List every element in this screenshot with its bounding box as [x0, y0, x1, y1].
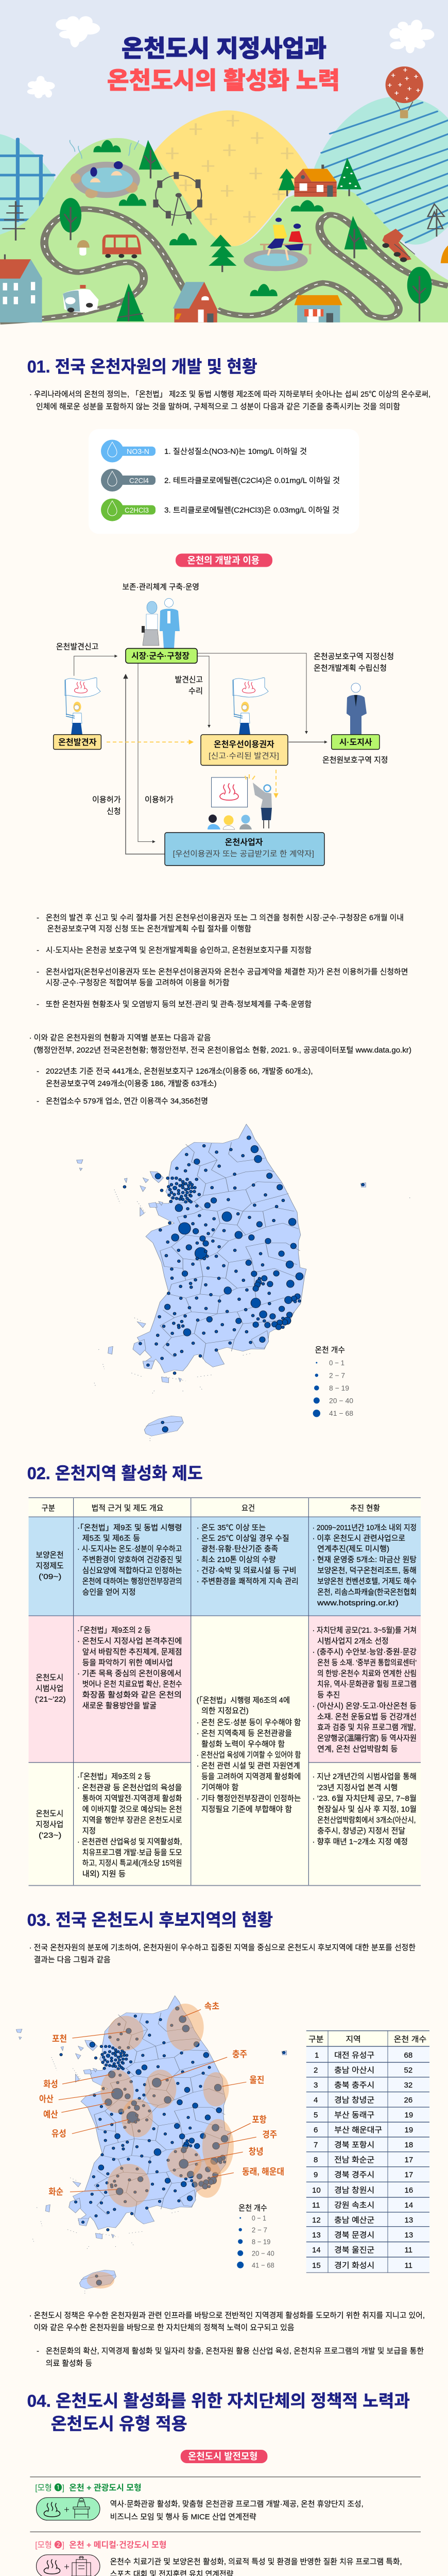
box: discoverer: 온천발견자: [58, 738, 97, 747]
criterion: C2HCl3: [101, 499, 339, 521]
legend: map 1: 0 − 1: [329, 1359, 344, 1367]
row: recuperation hot spring: 주변환경이 양호하여 건강증진 및: [82, 1555, 182, 1564]
box: priority user: [201, 735, 288, 766]
table header: 법적 근거 및 제도 개요: [92, 1504, 164, 1513]
section 04 heading: [27, 2392, 410, 2433]
status text: (행정안전부, 2022년 전국온천현황; 행정안전부, 전국 온천이용업소 현황, 2021. 9., 공공데이터포털 www.data.go.kr): [34, 1046, 411, 1055]
rows: 11: [405, 2261, 412, 2270]
row: designation project: 지역을 행안부 장관은 온천도시로: [82, 1816, 182, 1825]
icon: governor in suit: [347, 683, 367, 735]
legend: map 1: 41 − 68: [329, 1409, 353, 1417]
rows: 19: [405, 2111, 413, 2120]
region labels: 포천: [52, 2034, 67, 2044]
icon: officials: [142, 599, 180, 648]
row: recuperation hot spring: · 이후 온천도시 관련사업으로: [312, 1534, 405, 1543]
rows: 18: [405, 2141, 413, 2149]
box: mayor and governors: 시장·군수·구청장: [131, 651, 189, 660]
row: recuperation hot spring: 온천, 리솜스파캐슬(한국온천협회: [317, 1588, 417, 1597]
status text: 온천업소수 579개 업소, 연간 이용객수 34,356천명: [46, 1097, 208, 1106]
row: pilot project: · 온천도시 지정사업 본격추진에: [77, 1637, 182, 1646]
rows: [312, 2051, 413, 2270]
header: [308, 2035, 426, 2044]
rows: 3: [314, 2081, 318, 2090]
title line 2: 온천도시의 활성화 노력: [107, 67, 340, 94]
row: designation project: 충주시, 창녕군) 지정서 전달: [317, 1827, 405, 1835]
row: recuperation hot spring: ('09~): [39, 1572, 61, 1581]
rows: 14: [312, 2246, 321, 2255]
row: pilot project: 화장품 활성화와 같은 온천의: [82, 1691, 182, 1699]
row: recuperation hot spring: 심신요양에 적합하다고 인정하는: [82, 1566, 182, 1575]
legend: map 2: 8 − 19: [252, 2238, 271, 2246]
table header: 구분: [41, 1504, 55, 1513]
ferris wheel: [153, 172, 202, 226]
row: designation project: '23년 지정사업 본격 시행: [317, 1783, 398, 1792]
header: 구분: [308, 2035, 324, 2044]
trees: [2, 140, 444, 321]
rows: 경기 화성시: [334, 2261, 374, 2270]
icon: priority holder with flag: [233, 677, 268, 735]
row: designation project: [36, 1772, 417, 1878]
label: report acceptance: [175, 675, 203, 696]
row: recuperation hot spring: 승인을 얻어 지정: [82, 1588, 136, 1597]
bus: [102, 234, 142, 258]
row: pilot project: 벗어나 온천 치료요법 확산, 온천수: [82, 1680, 182, 1689]
status text: 온천공보호구역 249개소(이용중 186, 개발중 63개소): [46, 1079, 217, 1088]
merged cell: designation requirements: 기여해야 함: [201, 1783, 238, 1792]
legend: map 1: [313, 1346, 353, 1417]
box: operator: [우선이용권자 또는 공급받기로 한 계약자]: [173, 850, 314, 858]
rows: 6: [314, 2126, 318, 2134]
rows: 7: [314, 2141, 318, 2149]
row: designation project: 통하여 지역발전·지역경제 활성화: [82, 1794, 182, 1803]
row: pilot project: · 자치단체 공모('21. 3~5월)를 거쳐: [312, 1626, 417, 1635]
box: mayor and governors: [126, 649, 197, 663]
label: use permit: 이용허가: [145, 795, 174, 804]
flow diagram: [54, 583, 394, 866]
merged cell: designation requirements: 활성화 노력이 우수해야 함: [201, 1740, 285, 1749]
header: 지역: [346, 2035, 361, 2044]
map: candidate regions: [16, 1996, 328, 2294]
process notes: 온천의 발견 후 신고 및 수리 절차를 거친 온천우선이용권자 또는 그 의견을 청취한 시장·군수·구청장은 6개월 이내: [46, 913, 404, 922]
row: recuperation hot spring: ·「온천법」제9조 및 동법 시행령: [77, 1523, 182, 1532]
label: use permit request: 이용허가: [92, 795, 121, 804]
rows: 12: [312, 2216, 321, 2225]
rows: 충남 예산군: [334, 2216, 374, 2225]
row: designation project: · 온천관광 등 온천산업의 육성을: [77, 1783, 182, 1792]
policy text: 이와 같은 우수한 온천자원을 바탕으로 한 자치단체의 정책적 노력이 요구되고 있음: [34, 2324, 295, 2332]
box: operator: 온천사업자: [225, 838, 263, 847]
section 03 text: 결과는 다음 그림과 같음: [34, 1956, 111, 1964]
model 1: [35, 2483, 364, 2521]
process notes: 온천공보호구역 지정 신청 또는 온천개발계획 수립 절차를 이행함: [47, 924, 251, 934]
box: discoverer: [54, 735, 101, 749]
pill heading: development models: 온천도시 발전모형: [188, 2451, 257, 2462]
row: recuperation hot spring: · 주변환경을 쾌적하게 지속 관리: [197, 1577, 299, 1586]
criterion: C2Cl4: 2. 테트라클로로에틸렌(C2Cl4)은 0.01mg/L 이하일 것: [164, 476, 340, 485]
pill heading: development models: [181, 2450, 267, 2463]
row: designation project: 지정사업: [36, 1820, 63, 1829]
section 03 text: [29, 1943, 416, 1964]
rows: 16: [405, 2186, 413, 2195]
policy text: 온천문화의 확산, 지역경제 활성화 및 일자리 창출, 온천자원 활용 신산업 육성, 온천치유 프로그램의 개발 및 보급을 통한: [46, 2347, 424, 2355]
row: recuperation hot spring: 연계추진(제도 미시행): [317, 1545, 389, 1553]
rows: 32: [404, 2081, 412, 2090]
label: report acceptance: 발견신고: [175, 675, 203, 684]
couple at foot bath: [244, 218, 312, 271]
rows: 11: [405, 2246, 412, 2255]
shop: [295, 295, 342, 323]
row: pilot project: ('21~'22): [35, 1695, 66, 1704]
row: recuperation hot spring: 제5조 및 제6조 등: [82, 1534, 140, 1543]
process notes: -: [37, 946, 39, 955]
icon: presentation scene: [208, 774, 272, 829]
row: recuperation hot spring: · 2009~2011년간 10개소 내외 지정: [312, 1523, 417, 1532]
criterion: NO3-N: NO3-N: [127, 447, 149, 455]
process notes: -: [37, 913, 39, 922]
row: recuperation hot spring: 보양온천, 덕구온천리조트, 동해: [317, 1566, 417, 1575]
bushes: [93, 140, 324, 296]
section 03 text: · 전국 온천자원의 분포에 기초하여, 온천자원이 우수하고 집중된 지역을 중심으로 온천도시 후보지역에 대한 분포를 선정한: [29, 1943, 416, 1952]
row: recuperation hot spring: · 최소 210톤 이상의 수량: [197, 1555, 276, 1564]
merged cell: designation requirements: · 온천 지역축제 등 온천관광을: [197, 1729, 292, 1738]
row: designation project: · '23. 6월 자치단체 공모, 7~8월: [312, 1794, 417, 1803]
log cabin: [295, 165, 337, 197]
region leader lines: [59, 2009, 256, 2192]
process notes: 또한 온천자원 현황조사 및 오염방지 등의 보전·관리 및 관측·정보체계를 구축·운영함: [46, 1000, 312, 1009]
intro text: 인체에 해로운 성분을 포함하지 않는 것을 말하며, 구체적으로 그 성분이 다음과 같은 기준을 충족시키는 것을 의미함: [36, 402, 400, 411]
legend: map 2: [237, 2204, 274, 2269]
region labels: 포항: [252, 2115, 267, 2125]
rows: 대전 유성구: [334, 2051, 374, 2060]
region labels: 충주: [232, 2049, 247, 2059]
rows: 경북 울진군: [334, 2246, 374, 2255]
row: recuperation hot spring: · 시·도지사는 온도·성분이 우수하고: [77, 1545, 182, 1553]
policy text: 의료 활성화 등: [46, 2359, 92, 2368]
connector arrows: [74, 653, 327, 854]
model 1: [모형 ❶]: [35, 2483, 64, 2493]
row: designation project: 에 이바지할 것으로 예상되는 온천: [82, 1805, 182, 1814]
row: pilot project: 등 추진: [317, 1691, 340, 1699]
process notes: [37, 913, 408, 1009]
row: recuperation hot spring: · 온도 25℃ 이상일 경우 수질: [197, 1534, 289, 1543]
table header: 추진 현황: [350, 1504, 380, 1513]
process notes: -: [37, 968, 39, 976]
region labels: 화성: [43, 2079, 58, 2089]
rows: 4: [314, 2096, 318, 2105]
legend: map 1: 2 − 7: [329, 1371, 345, 1380]
section 02 heading: 02. 온천지역 활성화 제도: [27, 1464, 203, 1483]
label: protection zone request: [314, 652, 394, 673]
row: pilot project: 의 한방·온천수 치료와 연계한 산림: [317, 1669, 417, 1678]
label: report acceptance: 수리: [188, 687, 203, 696]
table header: 요건: [242, 1504, 255, 1513]
rows: 13: [405, 2216, 413, 2225]
legend: map 1: 20 − 40: [329, 1396, 353, 1404]
rows: 5: [314, 2111, 318, 2120]
rows: 15: [312, 2261, 321, 2270]
rows: 8: [314, 2156, 318, 2164]
policy text: -: [37, 2347, 39, 2355]
row: designation project: 하고, 지정시 특교세(개소당 15억원: [82, 1859, 182, 1868]
row: pilot project: · 기존 목욕 중심의 온천이용에서: [77, 1669, 181, 1678]
rows: 52: [404, 2066, 412, 2075]
policy text: · 온천도시 정책은 우수한 온천자원과 관련 인프라를 바탕으로 전반적인 지역경제 활성화를 도모하기 위한 취지를 지니고 있어,: [29, 2311, 425, 2320]
map: hot spring distribution: [77, 1124, 410, 1441]
rows: 경북 문경시: [334, 2231, 374, 2240]
model 2: 온천수 치료기관 및 보양온천 활성화, 의료적 특성 및 환경을 반영한 질환 치유 프로그램 특화,: [110, 2557, 402, 2566]
region labels: 예산: [43, 2110, 58, 2120]
header: 온천 개수: [394, 2035, 426, 2044]
section 01 heading: 01. 전국 온천자원의 개발 및 현황: [27, 357, 257, 376]
section 04 heading: 04. 온천도시 활성화를 위한 자치단체의 정책적 노력과: [27, 2392, 410, 2410]
row: pilot project: · (아산시) 온양·도고·아산온천 등: [312, 1702, 417, 1710]
label: use permit request: 신청: [107, 807, 121, 816]
roads: [0, 209, 448, 322]
model 2: [35, 2540, 402, 2576]
legend: map 2: 0 − 1: [252, 2214, 266, 2222]
box: governor: 시·도지사: [339, 738, 372, 747]
background hills: [0, 97, 448, 246]
intro text: · 우리나라에서의 온천의 정의는, 「온천법」 제2조 및 동법 시행령 제2조에 따라 지하로부터 솟아나는 섭씨 25℃ 이상의 온수로써,: [29, 390, 430, 399]
row: recuperation hot spring: 지정제도: [36, 1562, 64, 1570]
row: designation project: 온천산업박람회에서 3개소(아산시,: [317, 1816, 416, 1825]
clouds: [27, 16, 434, 98]
rows: 경남 창녕군: [334, 2096, 374, 2105]
status text: · 이와 같은 온천자원의 현황과 지역별 분포는 다음과 같음: [29, 1033, 211, 1042]
region labels: [39, 2002, 284, 2197]
rows: 13: [405, 2231, 413, 2240]
label: protection zone request: 온천공보호구역 지정신청: [314, 652, 394, 661]
caption: conservation system: 보존·관리체계 구축·운영: [123, 583, 199, 591]
row: designation project: 치유프로그램 개발·보급 등을 도모: [82, 1849, 182, 1857]
label: discovery report: 온천발견신고: [56, 642, 98, 651]
rows: 9: [314, 2171, 318, 2179]
criterion: NO3-N: [101, 440, 307, 463]
pill heading: development and use: 온천의 개발과 이용: [187, 555, 260, 566]
row: recuperation hot spring: [36, 1523, 417, 1607]
panel: development models: [30, 2477, 421, 2576]
region labels: 창녕: [249, 2147, 264, 2157]
rows: 26: [404, 2096, 412, 2105]
legend: map 1: 온천 개수: [315, 1346, 345, 1354]
ambulance: [63, 285, 98, 312]
row: pilot project: 시범사업: [36, 1684, 63, 1693]
rows: 13: [312, 2231, 321, 2240]
legend: map 2: 온천 개수: [238, 2204, 267, 2212]
row: pilot project: 연계, 온천 산업박람회 등: [317, 1745, 398, 1754]
row: pilot project: 시범사업지 2개소 선정: [317, 1637, 389, 1646]
rows: 강원 속초시: [334, 2201, 374, 2210]
table header: [41, 1504, 380, 1513]
fire truck: [382, 229, 415, 262]
row: recuperation hot spring: 광천·유황·탄산기준 충족: [201, 1545, 278, 1553]
title line 1: 온천도시 지정사업과: [122, 35, 326, 62]
row: designation project: · 지난 2개년간의 시범사업을 통해: [312, 1772, 417, 1781]
status text: -: [37, 1067, 39, 1076]
rows: 1: [315, 2051, 319, 2060]
row: pilot project: 온천도시: [36, 1673, 63, 1682]
row: pilot project: 새로운 활용방안을 발굴: [82, 1701, 157, 1710]
row: pilot project: 온양행궁(溫陽行宮) 등 역사자원: [317, 1734, 417, 1742]
region labels: 동래, 해운대: [242, 2167, 284, 2177]
rows: 11: [312, 2201, 320, 2210]
box: governor: [332, 735, 380, 749]
row: recuperation hot spring: · 현재 운영중 5개소: 마금산 원탕: [312, 1555, 417, 1564]
rows: 충남 아산시: [334, 2066, 374, 2075]
section 03 heading: 03. 전국 온천도시 후보지역의 현황: [27, 1910, 273, 1929]
label: use permit request: [92, 795, 121, 816]
rows: 부산 해운대구: [334, 2126, 382, 2134]
criterion: C2HCl3: 3. 트리클로로에틸렌(C2HCl3)은 0.03mg/L 이하일 것: [164, 506, 339, 515]
rows: 부산 동래구: [334, 2111, 374, 2120]
rows: 충북 충주시: [334, 2081, 374, 2090]
row: pilot project: [35, 1626, 417, 1754]
row: designation project: ('23~): [39, 1831, 61, 1840]
rows: 전남 화순군: [334, 2156, 374, 2164]
rows: 경남 창원시: [334, 2186, 374, 2195]
row: pilot project: 온천 등 소재. '중부권 통합의료센터': [317, 1658, 417, 1667]
row: recuperation hot spring: www.hotspring.or.kr): [317, 1599, 399, 1607]
rows: 17: [405, 2171, 413, 2179]
process notes: 시·도지사는 온천공 보호구역 및 온천개발계획을 승인하고, 온천원보호지구를 지정함: [46, 946, 312, 955]
region labels: 화순: [48, 2187, 63, 2197]
region labels: 경주: [262, 2130, 277, 2140]
rows: 10: [312, 2186, 321, 2195]
mushroom: [77, 240, 90, 256]
row: designation project: 현장실사 및 심사 후 지정, 10월: [317, 1805, 417, 1814]
table: activation systems: [29, 1498, 421, 1886]
legend: map 2: 41 − 68: [252, 2261, 274, 2269]
box: priority user: [신고·수리된 발견자]: [209, 752, 279, 760]
merged cell: designation requirements: · 기타 행정안전부장관이 인정하는: [197, 1794, 301, 1803]
row: designation project: · 향후 매년 1~2개소 지정 예정: [312, 1837, 408, 1846]
region labels: 유성: [51, 2129, 66, 2139]
merged cell: designation requirements: · 온천산업 육성에 기여할 수 있어야 함: [197, 1751, 301, 1759]
row: pilot project: 앞서 바람직한 추진체계, 문제점: [82, 1648, 182, 1656]
process notes: 시장·군수·구청장은 적합여부 등을 고려하여 이용을 허가함: [46, 978, 230, 987]
legend: map 2: 20 − 40: [252, 2249, 274, 2258]
legend: map 1: 8 − 19: [329, 1384, 349, 1392]
row: pilot project: 치유, 역사·문화관광 힐링 프로그램: [317, 1680, 417, 1689]
status text: 2022년초 기준 전국 441개소, 온천원보호지구 126개소(이용중 66, 개발중 60개소),: [46, 1067, 313, 1076]
rows: 68: [404, 2051, 412, 2060]
rows: 경북 포항시: [334, 2141, 374, 2149]
green hill: [0, 138, 448, 323]
box: priority user: 온천우선이용권자: [214, 740, 274, 749]
region labels: 아산: [39, 2094, 54, 2104]
rows: 14: [405, 2201, 413, 2210]
label: protection zone request: 온천개발계획 수립신청: [314, 664, 387, 673]
row: designation project: · 온천관련 산업육성 및 지역활성화,: [77, 1837, 182, 1846]
box: operator: [165, 833, 324, 866]
hot air balloon: [386, 66, 423, 118]
criterion: C2HCl3: C2HCl3: [125, 506, 149, 514]
model 1: 역사·문화관광 활성화, 맞춤형 온천관광 프로그램 개발·제공, 온천 휴양단지 조성,: [110, 2500, 364, 2509]
row: recuperation hot spring: 보양온천 컨벤션호텔, 거제도 해수: [317, 1577, 417, 1586]
model 1: 온천 + 관광도시 모형: [69, 2483, 142, 2493]
section 04 heading: 온천도시 유형 적용: [51, 2414, 187, 2433]
rows: 19: [405, 2126, 413, 2134]
red roofed house: [173, 282, 217, 323]
row: designation project: 내외) 지원 등: [82, 1870, 126, 1878]
row: recuperation hot spring: · 건강·숙박 및 의료시설 등 구비: [197, 1566, 297, 1575]
candidate region overlays: [87, 2004, 234, 2289]
merged cell: designation requirements: 의한 지정요건): [201, 1706, 249, 1716]
merged cell: designation requirements: · 온천 온도·성분 등이 우수해야 함: [197, 1718, 301, 1727]
hero illustration and title: [0, 0, 448, 323]
row: pilot project: 등을 파악하기 위한 예비사업: [82, 1658, 173, 1667]
hot spring pool with bathers: [70, 140, 140, 198]
table: hot springs by region: [306, 2031, 429, 2273]
row: recuperation hot spring: 보양온천: [36, 1551, 64, 1560]
region labels: 울진: [249, 2075, 264, 2085]
region labels: 속초: [204, 2002, 219, 2011]
merged cell: designation requirements: (「온천법」시행령 제6조의 4에: [197, 1696, 290, 1705]
icon: discoverer with flag: [65, 677, 100, 735]
pill heading: development and use: [176, 553, 272, 567]
row: pilot project: ·「온천법」제9조의 2 등: [77, 1626, 151, 1635]
merged cell: designation requirements: [197, 1696, 301, 1814]
rows: 경북 경주시: [334, 2171, 374, 2179]
policy text: [29, 2311, 425, 2368]
model 1: 비즈니스 모임 및 행사 등 MICE 산업 연계전략: [110, 2513, 256, 2521]
model 2: 온천 + 메디컬·건강도시 모형: [69, 2540, 167, 2550]
rows: 17: [405, 2156, 413, 2164]
legend: map 2: 2 − 7: [252, 2226, 267, 2234]
merged cell: designation requirements: 등을 고려하여 지역경제 활성화에: [201, 1772, 301, 1781]
criterion: NO3-N: 1. 질산성질소(NO3-N)는 10mg/L 이하일 것: [164, 447, 307, 456]
rows: 2: [314, 2066, 318, 2075]
merged cell: designation requirements: 지정필요 기준에 부합해야 함: [201, 1805, 292, 1814]
row: pilot project: 소재. 온천 운동요법 등 건강개선: [317, 1713, 417, 1721]
status text: -: [37, 1097, 39, 1106]
row: designation project: 지정: [82, 1827, 96, 1835]
model 2: [모형 ❷]: [35, 2540, 64, 2550]
label: source protection: 온천원보호구역 지정: [322, 756, 388, 765]
row: recuperation hot spring: · 온도 35℃ 이상 또는: [197, 1523, 266, 1532]
blue house: [0, 255, 42, 323]
status text: [29, 1033, 411, 1106]
row: pilot project: 효과 검증 및 치유 프로그램 개발,: [317, 1723, 416, 1732]
criterion: C2Cl4: [101, 469, 340, 492]
panel: water quality criteria: [89, 429, 359, 534]
process notes: 온천사업자(온천우선이용권자 또는 온천우선이용권자와 온천수 공급계약을 체결한 자)가 온천 이용허가를 신청하면: [46, 968, 408, 976]
row: pilot project: · (충주시) 수안보·능암·중원·문강: [312, 1648, 417, 1656]
criterion: C2Cl4: C2Cl4: [129, 476, 149, 484]
row: designation project: ·「온천법」제9조의 2 등: [77, 1772, 151, 1781]
merged cell: designation requirements: · 온천 관련 시설 및 관련 자원연계: [197, 1761, 300, 1770]
process notes: -: [37, 1000, 39, 1009]
row: designation project: 온천도시: [36, 1809, 63, 1818]
intro text: [29, 390, 430, 411]
row: recuperation hot spring: 온천에 대하여는 행정안전부장관의: [82, 1577, 182, 1586]
